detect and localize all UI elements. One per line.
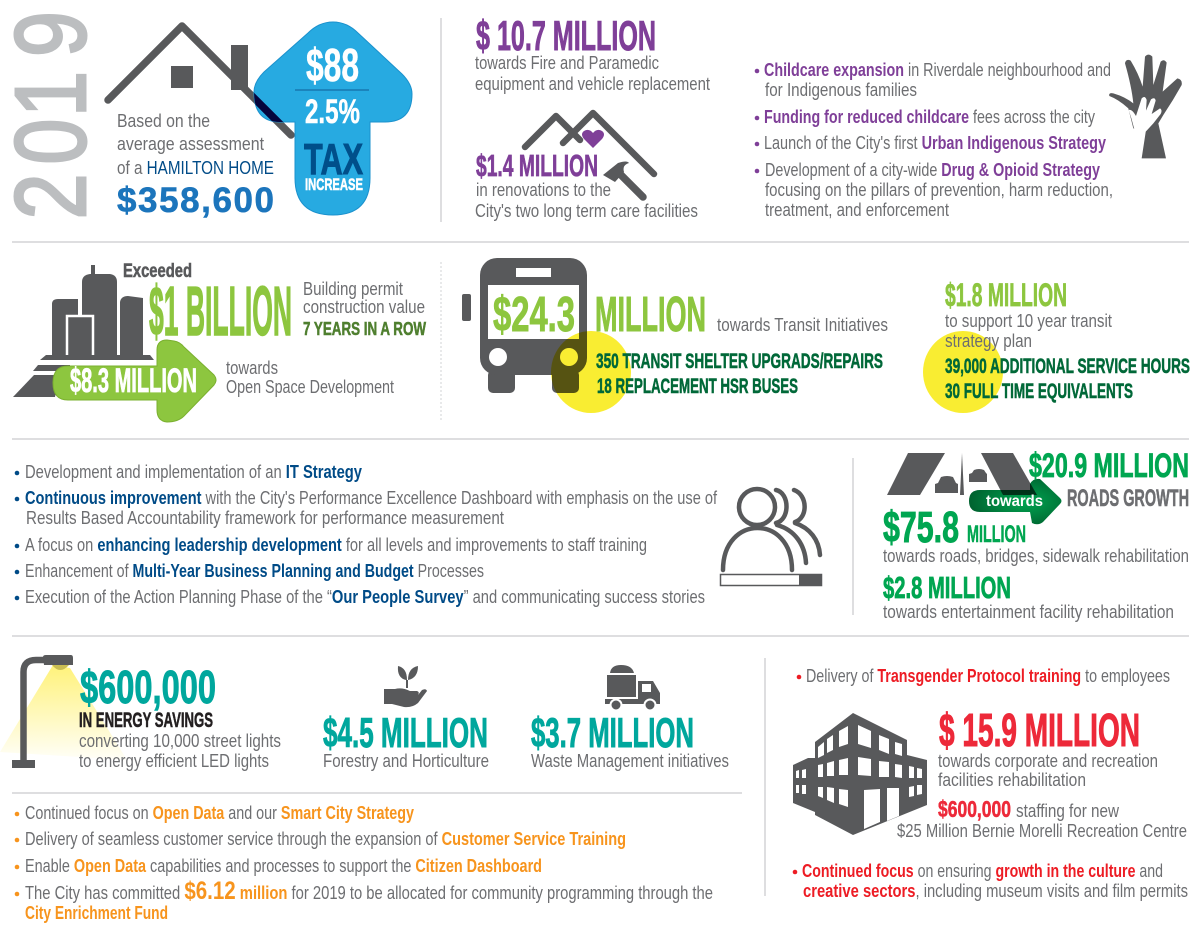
- care facilities text: City's two long term care facilities: [475, 201, 698, 221]
- fire funding text: equipment and vehicle replacement: [475, 74, 710, 94]
- bullet list: Development and implementation of an IT Strategy: [25, 462, 362, 482]
- bullet list: treatment, and enforcement: [765, 200, 949, 220]
- arrow: towards roads growth: towards: [986, 493, 1043, 510]
- bullet list: Execution of the Action Planning Phase of the “Our People Survey” and communicating success stories: [25, 587, 705, 607]
- service details: [945, 355, 1190, 403]
- transit description: towards Transit Initiatives: [717, 315, 888, 335]
- transit total figure: MILLION: [595, 288, 706, 342]
- bullet list: A focus on enhancing leadership development for all levels and improvements to staff training: [25, 535, 647, 555]
- transit details: 350 TRANSIT SHELTER UPGRADS/REPAIRS: [596, 350, 883, 373]
- highlight circle: [551, 331, 631, 413]
- bullet list: Launch of the City's first Urban Indigenous Strategy: [764, 133, 1106, 153]
- transit strategy text: [945, 311, 1112, 351]
- icon: hammer: [603, 162, 643, 197]
- panel: roads and facilities: [883, 447, 1189, 622]
- culture bullet: [793, 861, 1188, 901]
- panel: open data list: [15, 803, 713, 923]
- rehabilitation text: [938, 751, 1158, 790]
- waste text: Waste Management initiatives: [531, 751, 729, 771]
- rehabilitation figure: MILLION: [967, 521, 1026, 548]
- bullet list: Childcare expansion in Riverdale neighbourhood and: [764, 60, 1111, 80]
- fire funding text: towards Fire and Paramedic: [475, 53, 659, 73]
- waste figure: $3.7 MILLION: [531, 709, 694, 756]
- energy text: converting 10,000 street lights: [79, 731, 281, 751]
- bullet list: focusing on the pillars of prevention, harm reduction,: [765, 180, 1113, 200]
- icon: house: [108, 26, 291, 135]
- transit details: [596, 350, 883, 398]
- bullet list: [15, 462, 718, 607]
- permit value text: Exceeded: [123, 261, 192, 282]
- rehabilitation text: towards corporate and recreation: [938, 751, 1158, 771]
- bullet list: Results Based Accountability framework for performance measurement: [26, 508, 504, 528]
- rehabilitation text: facilities rehabilitation: [938, 770, 1086, 790]
- icon: waste truck: [605, 665, 660, 710]
- culture bullet: Continued focus on ensuring growth in the culture and: [802, 861, 1163, 881]
- bullet list: Funding for reduced childcare fees across the city: [764, 107, 1095, 127]
- panel: IT and people list: [15, 462, 822, 607]
- arrow: open space funding: [53, 340, 216, 422]
- energy savings figure: $600,000: [80, 661, 216, 713]
- panel: open data list: Continued focus on Open Data and our Smart City Strategy: [25, 803, 414, 823]
- transit total figure: [493, 288, 706, 342]
- bullet list: Development of a city-wide Drug & Opioid Strategy: [765, 160, 1100, 180]
- icon: plant in hand: [384, 666, 427, 707]
- energy text: to energy efficient LED lights: [79, 751, 269, 771]
- icon: roads and cars: [887, 453, 1037, 495]
- energy text: [79, 731, 281, 771]
- panel: 2019 property tax: [0, 11, 412, 220]
- icon: bus: [462, 258, 587, 393]
- panel: open data list: Delivery of seamless customer service through the expansion of Customer Service Training: [25, 829, 626, 849]
- panel: energy forestry waste: [0, 655, 729, 771]
- care facilities figure: $1.4 MILLION: [476, 148, 598, 183]
- energy savings figure: IN ENERGY SAVINGS: [79, 709, 213, 732]
- up arrow: tax increase: $88: [306, 39, 359, 91]
- up arrow: tax increase: TAX: [304, 135, 363, 184]
- forestry figure: $4.5 MILLION: [323, 709, 488, 756]
- transit strategy figure: $1.8 MILLION: [945, 277, 1067, 313]
- icon: city skyline: [13, 265, 154, 397]
- panel: open data list: Enable Open Data capabilities and processes to support the Citizen Dashboard: [25, 856, 542, 876]
- assessment text: Based on the: [117, 111, 210, 131]
- rehabilitation figure: $75.8: [883, 503, 959, 552]
- panel: building permits and open space: [13, 261, 426, 422]
- panel: childcare and indigenous list: [755, 55, 1182, 220]
- open space text: Open Space Development: [226, 377, 394, 397]
- icon: building: [793, 713, 927, 835]
- transit details: 18 REPLACEMENT HSR BUSES: [597, 375, 798, 398]
- energy savings figure: [79, 661, 216, 732]
- care facilities text: [475, 180, 698, 221]
- permit description: 7 YEARS IN A ROW: [303, 319, 426, 339]
- bullet list: Continuous improvement with the City's Performance Excellence Dashboard with emphasis on the use of: [25, 488, 718, 508]
- assessment text: [117, 111, 274, 220]
- transit strategy text: strategy plan: [945, 331, 1032, 351]
- assessment text: of a HAMILTON HOME: [117, 158, 274, 178]
- icon: roofs and heart: [525, 113, 654, 174]
- open space text: towards: [226, 358, 278, 378]
- bullet list: for Indigenous families: [765, 80, 917, 100]
- roads growth figure: [1029, 447, 1189, 512]
- fire funding text: [475, 53, 710, 94]
- permit description: [303, 279, 426, 339]
- permit description: Building permit: [303, 279, 403, 299]
- up arrow: tax increase: INCREASE: [305, 175, 363, 194]
- staffing text: [897, 796, 1187, 841]
- icon: street lamp: [0, 655, 127, 768]
- highlight circle: [923, 331, 1003, 413]
- icon: people: [720, 489, 822, 586]
- panel: fire and long term care: [475, 12, 710, 221]
- forestry text: Forestry and Horticulture: [323, 751, 489, 771]
- arrow: towards roads growth: [969, 479, 1062, 524]
- transgender protocol bullet: Delivery of Transgender Protocol training to employees: [806, 666, 1170, 686]
- bullet list: [755, 60, 1113, 220]
- open space text: [226, 358, 394, 397]
- icon: hands: [1109, 55, 1182, 158]
- transit strategy text: to support 10 year transit: [945, 311, 1112, 331]
- transit total figure: $24.3: [493, 288, 575, 342]
- arrow: open space funding: $8.3 MILLION: [70, 362, 197, 400]
- staffing text: $600,000: [938, 796, 1011, 822]
- up arrow: tax increase: 2.5%: [305, 93, 360, 131]
- entertainment figure: $2.8 MILLION: [883, 570, 1011, 605]
- assessment text: average assessment: [117, 134, 264, 154]
- fire funding figure: $ 10.7 MILLION: [476, 12, 656, 59]
- panel: open data list: The City has committed $6.12 million for 2019 to be allocated for community programming through the: [25, 877, 713, 905]
- panel: building permits and open space: $1 BILLION: [149, 272, 292, 350]
- assessment text: $358,600: [117, 181, 274, 220]
- panel: open data list: City Enrichment Fund: [25, 903, 168, 923]
- bullet list: Enhancement of Multi-Year Business Planning and Budget Processes: [25, 561, 484, 581]
- up arrow: tax increase: [254, 22, 412, 216]
- staffing text: staffing for new: [1016, 801, 1120, 821]
- panel: transit initiatives: [462, 258, 1190, 413]
- panel: culture and recreation: [793, 666, 1188, 901]
- care facilities text: in renovations to the: [476, 180, 611, 200]
- permit description: construction value: [303, 297, 425, 317]
